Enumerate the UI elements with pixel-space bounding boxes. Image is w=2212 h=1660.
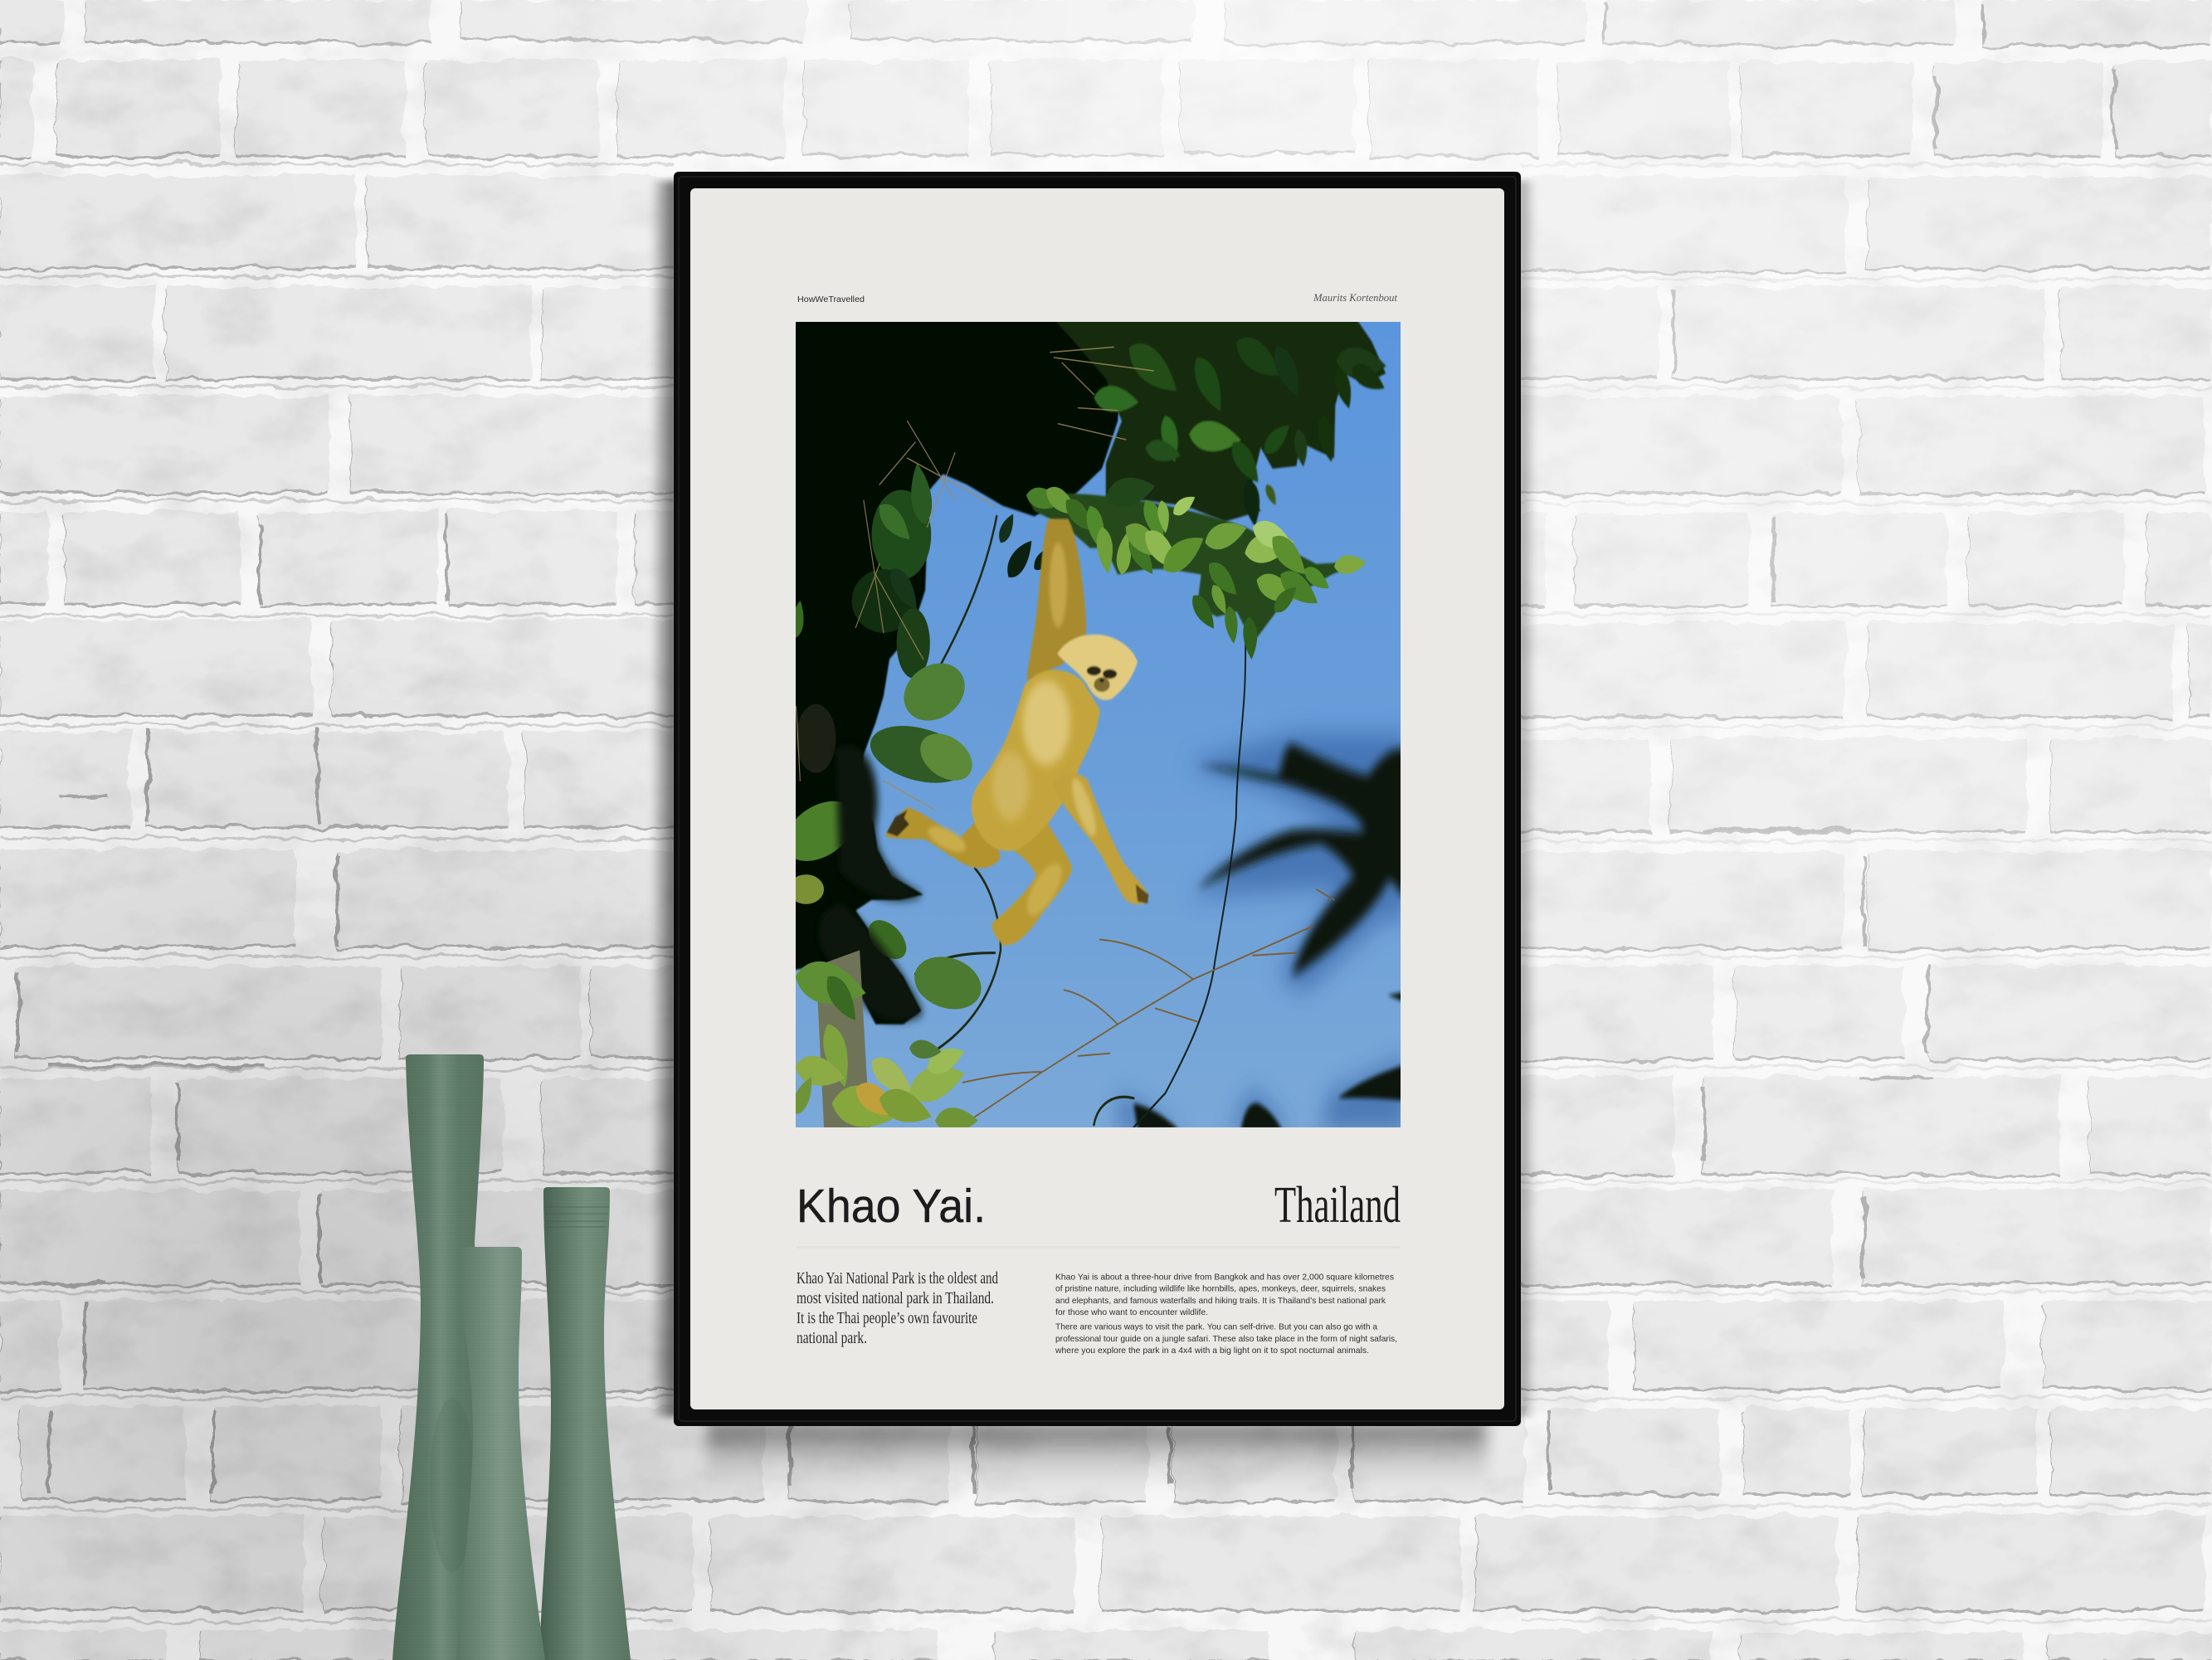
tree trunk and bright lower-left leaves xyxy=(789,950,978,1132)
sunlit foliage upper right xyxy=(1050,315,1388,528)
body paragraphs: for those who want to encounter wildlife. xyxy=(1055,1307,1208,1317)
bright leaf cluster xyxy=(996,471,1367,660)
leaves on the left xyxy=(779,655,984,1020)
body paragraphs: and elephants, and famous waterfalls and hiking trails. It is Thailand’s best national park xyxy=(1055,1296,1386,1306)
gibbon head xyxy=(1057,635,1138,700)
vase: tall xyxy=(392,1054,490,1660)
location: Thailand xyxy=(1274,1177,1401,1234)
vines and branches xyxy=(915,516,1334,1127)
poster frame xyxy=(674,172,1521,1426)
body paragraphs: professional tour guide on a jungle safari. These also take place in the form of night safaris, xyxy=(1055,1334,1397,1344)
frame shadow xyxy=(650,181,1537,1490)
body paragraphs: of pristine nature, including wildlife like hornbills, apes, monkeys, deer, squirrels, snakes xyxy=(1055,1284,1386,1294)
vase: middle xyxy=(456,1247,545,1660)
gibbon xyxy=(885,519,1148,945)
gibbon rear leg xyxy=(885,807,1001,869)
vases xyxy=(348,1054,631,1660)
intro paragraph: It is the Thai people’s own favourite xyxy=(797,1309,977,1327)
brand label: HowWeTravelled xyxy=(797,295,865,304)
dark left foliage patches xyxy=(789,461,935,773)
pale dead twigs xyxy=(797,347,1153,810)
intro paragraph xyxy=(797,1269,998,1347)
intro paragraph: most visited national park in Thailand. xyxy=(797,1289,994,1307)
vase: right xyxy=(539,1187,631,1660)
photo: gibbon hanging from a tree xyxy=(779,315,1407,1132)
body paragraphs: Khao Yai is about a three-hour drive from Bangkok and has over 2,000 square kilometres xyxy=(1055,1273,1394,1283)
gibbon face xyxy=(1087,666,1117,692)
gibbon hanging arm xyxy=(1052,773,1148,904)
intro paragraph: Khao Yai National Park is the oldest and xyxy=(797,1269,998,1288)
body paragraphs: There are various ways to visit the park. You can self-drive. But you can also go with a xyxy=(1055,1322,1377,1332)
title: Khao Yai. xyxy=(797,1180,986,1233)
dark canopy xyxy=(788,315,1122,1025)
gibbon torso xyxy=(972,670,1100,851)
gibbon raised arm xyxy=(1026,519,1086,680)
blurred foreground leaves at right xyxy=(1118,733,1407,1130)
body paragraphs: where you explore the park in a 4x4 with a big light on it to spot nocturnal animals. xyxy=(1055,1346,1369,1356)
photographer credit: Maurits Kortenbout xyxy=(1313,292,1398,304)
gibbon front leg xyxy=(992,820,1072,945)
intro paragraph: national park. xyxy=(797,1329,867,1347)
body paragraphs xyxy=(1055,1273,1397,1356)
